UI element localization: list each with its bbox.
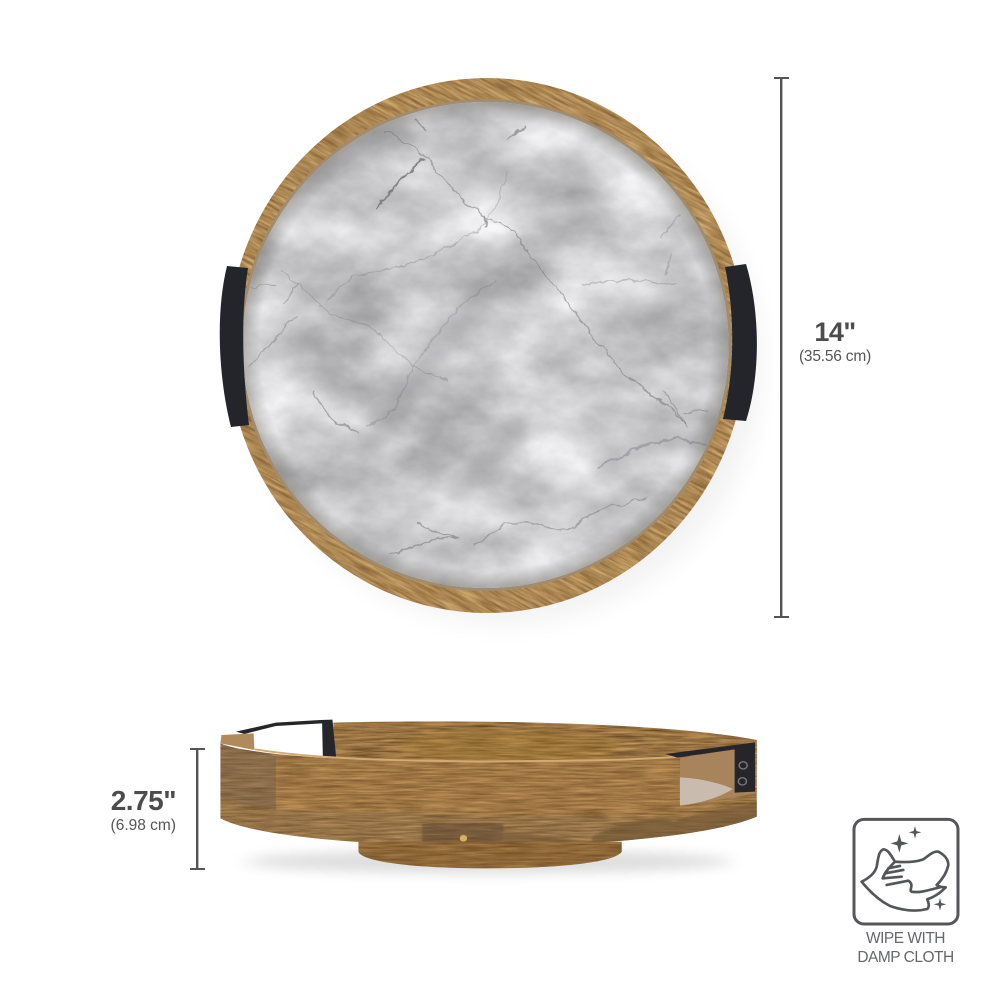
- tray side view: [218, 718, 759, 874]
- left inner rim: [220, 733, 254, 750]
- fingers: [883, 862, 940, 892]
- left wood block: [218, 740, 276, 810]
- wood ring: [239, 78, 736, 613]
- height label: [799, 317, 871, 365]
- soft grey marble bands: [256, 131, 717, 491]
- height label: (35.56 cm): [799, 348, 871, 365]
- ground shadow: [244, 850, 733, 874]
- marble surface: [240, 100, 730, 590]
- care icon: wipe with damp cloth: [854, 819, 958, 924]
- glassy edge shading: [242, 102, 728, 588]
- inner rim: [240, 99, 732, 591]
- depth label: 2.75": [111, 785, 176, 816]
- base foot: [357, 842, 624, 870]
- depth dimension line: [190, 748, 205, 870]
- care label: WIPE WITH: [866, 930, 945, 947]
- lower band: [220, 804, 730, 842]
- depth label: (6.98 cm): [111, 817, 176, 834]
- visible marble inside: [680, 777, 733, 805]
- depth label: [111, 785, 176, 834]
- sparkles: [891, 826, 946, 911]
- care label: DAMP CLOTH: [857, 949, 954, 966]
- right handle: [723, 264, 757, 421]
- tray top view: [220, 78, 757, 618]
- height label: 14": [814, 317, 856, 347]
- dark lower grain: [592, 800, 757, 842]
- top rim highlight: [255, 749, 679, 761]
- icon frame: [854, 819, 958, 924]
- right handle opening: [680, 745, 755, 807]
- tray body: [218, 738, 759, 848]
- cloth outline: [862, 849, 948, 910]
- left handle: [220, 266, 249, 427]
- back wall: [331, 718, 759, 765]
- upper band warmth: [276, 758, 679, 815]
- height dimension line: [774, 77, 789, 618]
- knot: [460, 835, 467, 842]
- care label: [857, 930, 954, 966]
- rivets: [738, 762, 747, 785]
- marble veins: [249, 120, 710, 556]
- left handle: [236, 720, 336, 758]
- tray drop shadow: [250, 107, 760, 623]
- right handle bar: [665, 742, 755, 793]
